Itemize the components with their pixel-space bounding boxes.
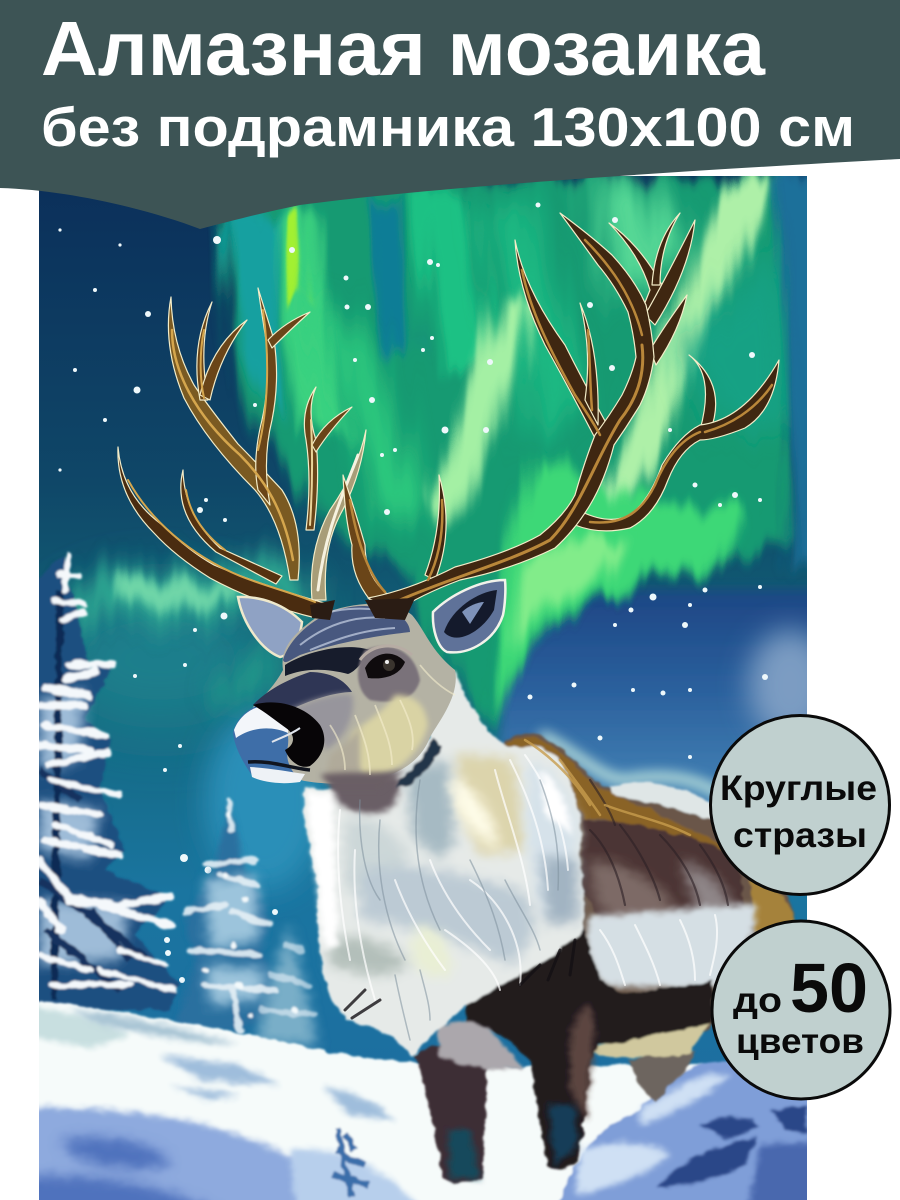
dark brow band <box>285 647 370 676</box>
badge: up to 50 colours: цветов <box>736 1022 864 1061</box>
hind leg <box>628 1050 695 1102</box>
nose bridge <box>253 672 352 707</box>
reindeer body <box>302 670 793 1183</box>
pale flank <box>587 905 756 989</box>
falling snow <box>58 202 768 1017</box>
night sky background <box>39 176 807 1070</box>
antler bases <box>310 598 415 620</box>
badge: up to 50 colours: до <box>733 981 782 1020</box>
subtitle: без подрамника 130х100 см <box>41 96 855 158</box>
rear body base <box>502 732 796 1033</box>
fur strokes <box>338 740 728 1040</box>
badge: up to 50 colours: 50 <box>790 949 868 1027</box>
dark brown flank <box>582 820 743 925</box>
eye socket and cheek <box>358 646 420 702</box>
forehead <box>283 606 410 662</box>
right ear <box>433 580 505 652</box>
eye <box>360 646 412 678</box>
badge: round rhinestones <box>710 716 890 894</box>
left antler <box>118 288 366 619</box>
left ear <box>238 597 302 657</box>
under belly <box>590 1020 712 1058</box>
muzzle and nose <box>233 702 324 783</box>
title: Алмазная мозаика <box>41 6 766 92</box>
antlers <box>118 213 779 619</box>
head shape <box>249 604 456 784</box>
white neck and chest <box>302 670 583 1057</box>
snowy fir trees <box>0 555 318 1045</box>
golden back stripe <box>503 737 725 850</box>
neck shading <box>407 760 455 860</box>
badge: up to 50 colours <box>712 921 890 1099</box>
throat shadow <box>330 775 402 814</box>
badge: round rhinestones: Круглые <box>720 769 877 808</box>
dark belly and front legs <box>467 925 712 1170</box>
snowy ground <box>39 1000 807 1200</box>
badge: round rhinestones: стразы <box>733 816 867 855</box>
head fur <box>330 665 455 775</box>
glow along the back <box>533 724 714 802</box>
header banner <box>0 0 900 229</box>
tan rump <box>748 880 796 932</box>
right antler <box>343 213 779 612</box>
head <box>233 580 505 790</box>
aurora borealis <box>60 176 840 725</box>
reindeer painting <box>39 176 807 1200</box>
